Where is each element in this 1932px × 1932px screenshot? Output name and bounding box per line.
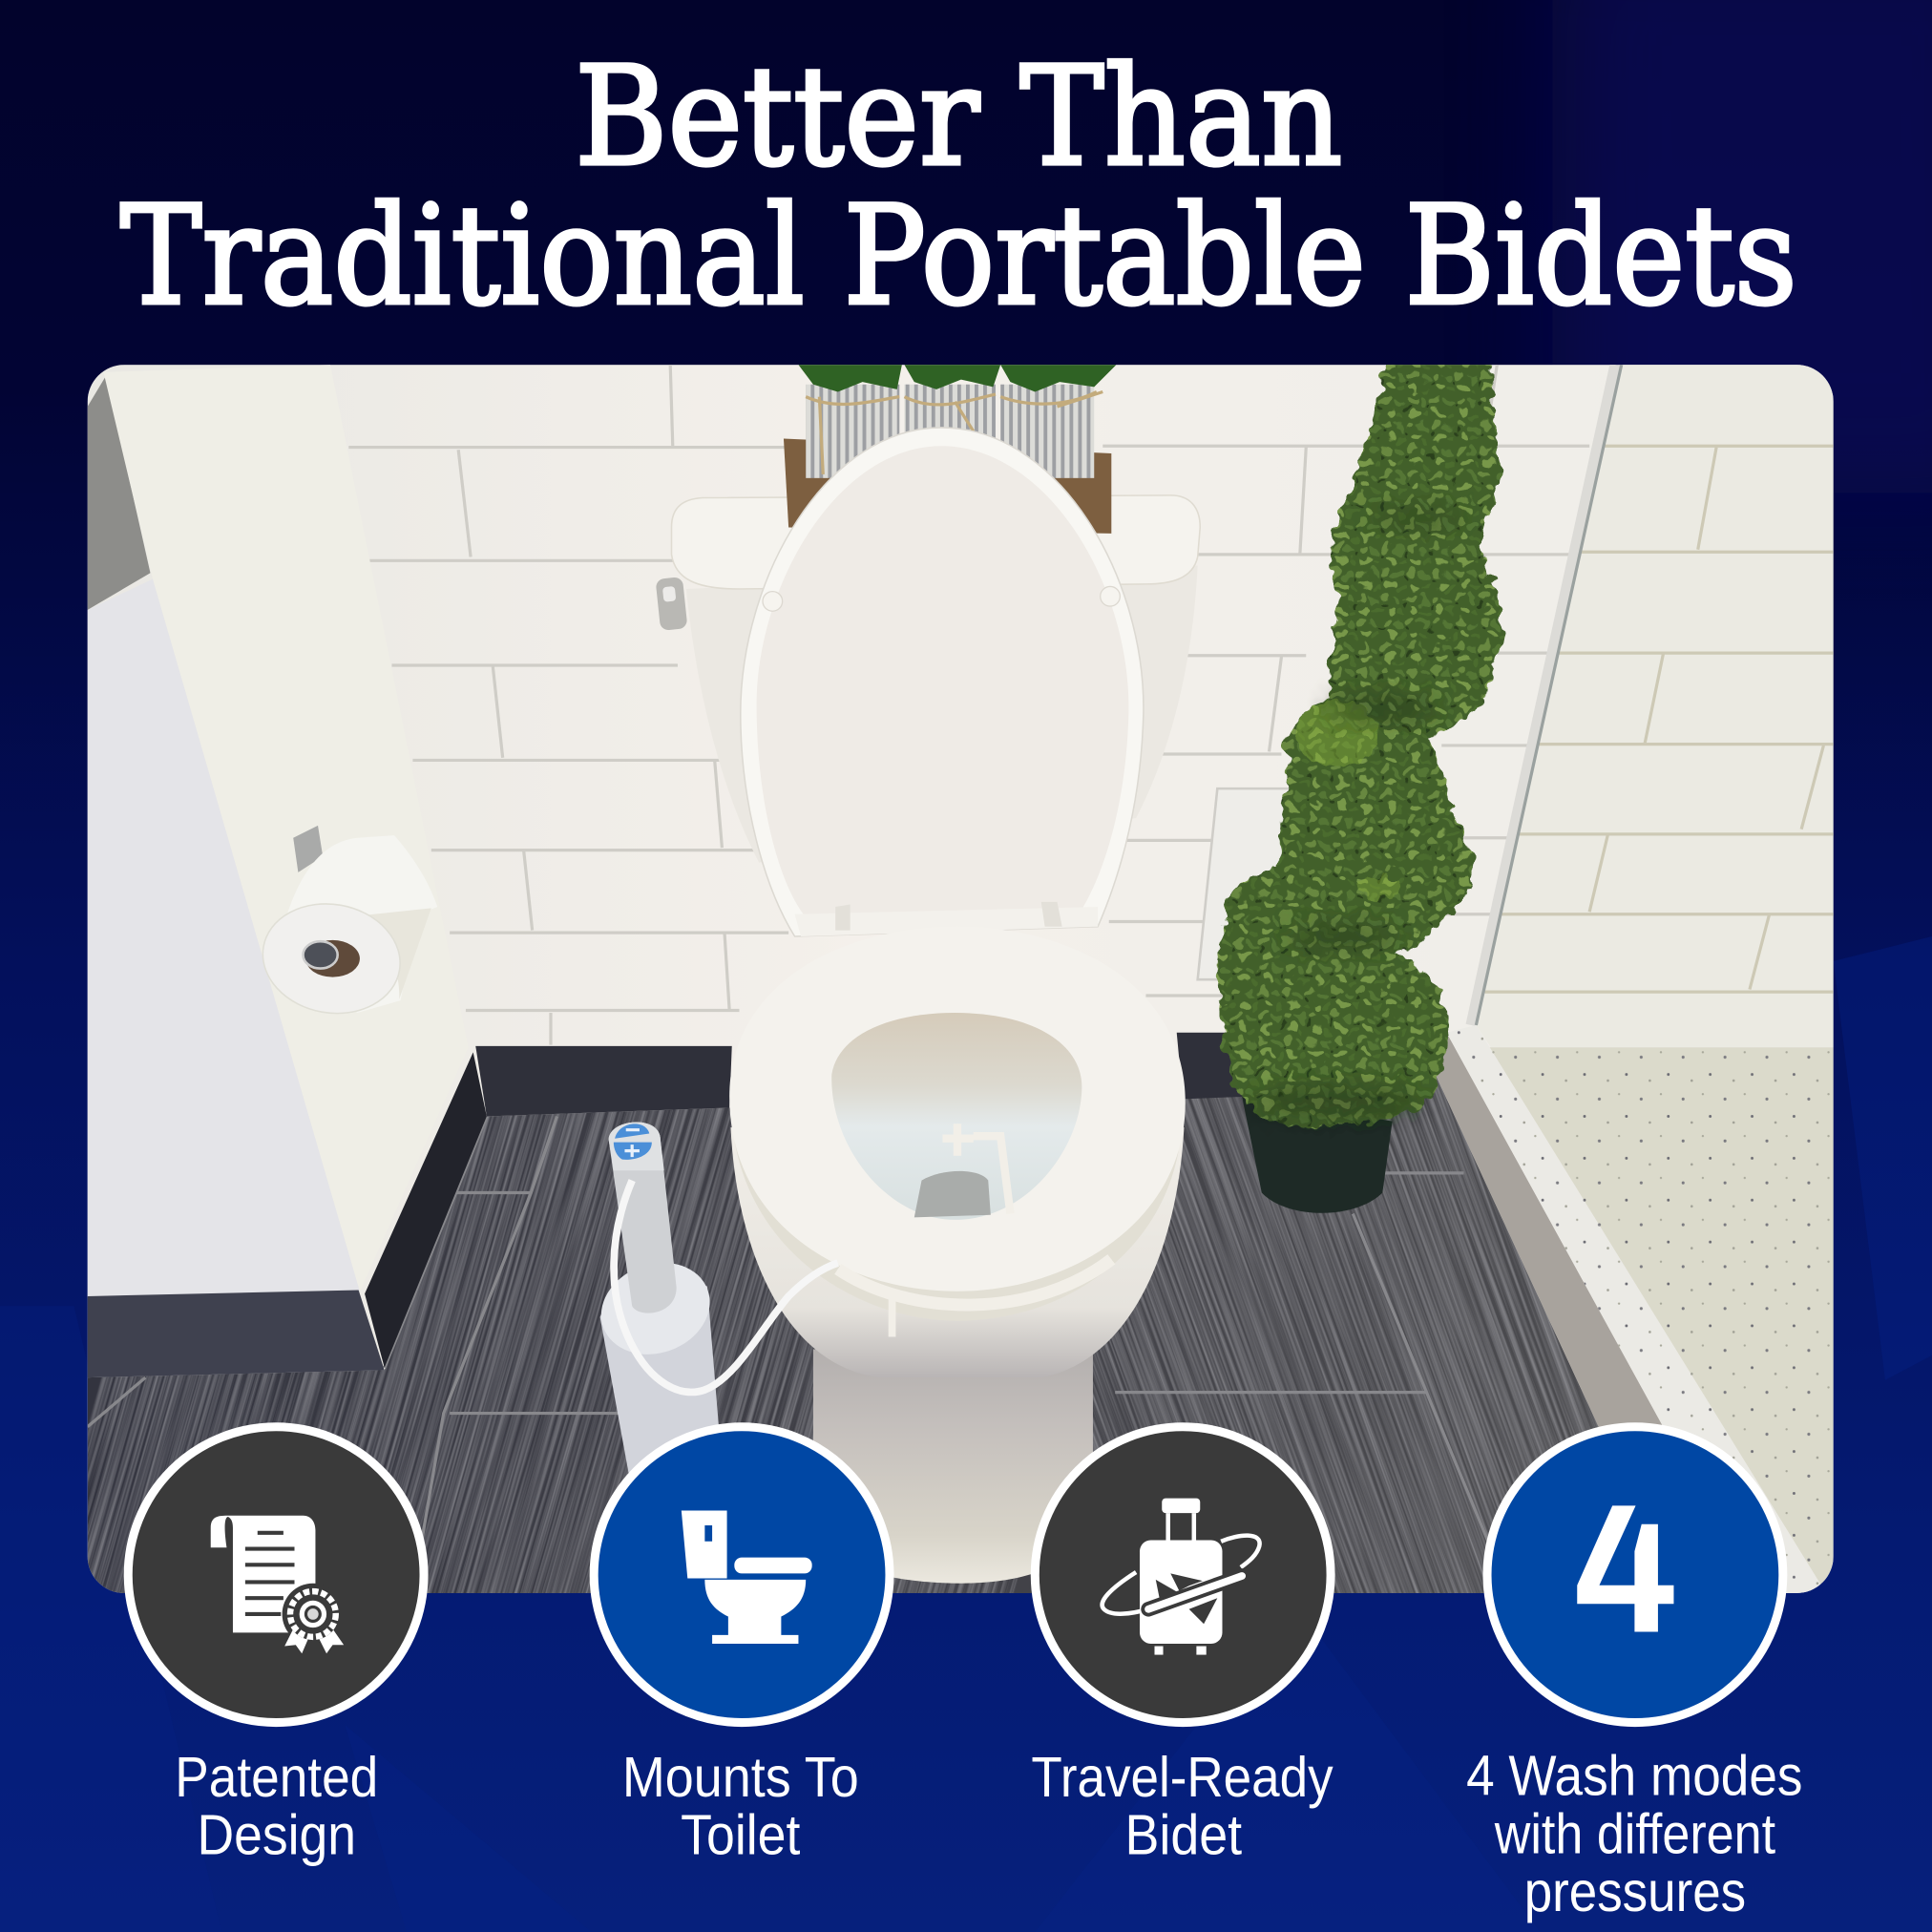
left side wall bbox=[88, 579, 360, 1297]
icon circle: patented design bbox=[128, 1427, 424, 1723]
shower curb bbox=[1435, 1025, 1826, 1593]
label: mounts to toilet bbox=[622, 1745, 859, 1867]
floor tile joints bbox=[88, 1116, 1487, 1543]
label: patented design bbox=[175, 1745, 378, 1867]
label: four wash modes: pressures bbox=[1524, 1859, 1746, 1923]
access panel on wall bbox=[1196, 787, 1289, 981]
shower wall bbox=[1621, 365, 1834, 1048]
toilet bowl bbox=[730, 1127, 1184, 1377]
planter box bbox=[784, 365, 1116, 534]
icon: certificate scroll with seal bbox=[211, 1516, 344, 1653]
icon circle: mounts to toilet bbox=[594, 1427, 890, 1723]
label: four wash modes: with different bbox=[1494, 1801, 1776, 1865]
shower floor bbox=[1488, 1047, 1834, 1593]
shower glass edge bbox=[1471, 365, 1615, 1025]
label: mounts to toilet: Mounts To bbox=[622, 1745, 859, 1809]
icon: toilet bbox=[682, 1511, 812, 1644]
seat clip bbox=[838, 1259, 1111, 1337]
pillar face bbox=[105, 365, 370, 562]
panel: bathroom photo bbox=[88, 365, 1834, 1593]
label: four wash modes: 4 Wash modes bbox=[1466, 1744, 1802, 1808]
label: patented design: Design bbox=[198, 1803, 356, 1867]
icon: suitcase with plane bbox=[1102, 1499, 1260, 1655]
toilet seat bbox=[729, 927, 1186, 1321]
plant topiary bbox=[1217, 357, 1503, 1213]
title: Better Than bbox=[575, 37, 1342, 197]
floor bbox=[88, 1077, 1599, 1593]
wall tile joints bbox=[348, 365, 1589, 1045]
title bbox=[120, 37, 1797, 336]
left dark recess bbox=[88, 376, 150, 610]
label: travel-ready bidet: Bidet bbox=[1125, 1803, 1243, 1867]
icon circle: travel-ready bbox=[1035, 1427, 1331, 1723]
baseboards bbox=[88, 1290, 385, 1377]
label: travel-ready bidet: Travel-Ready bbox=[1031, 1745, 1334, 1809]
label: four wash modes bbox=[1466, 1744, 1802, 1923]
toilet lid bbox=[741, 428, 1144, 936]
icon: numeral 4 bbox=[1577, 1505, 1673, 1632]
icon circle: four wash modes bbox=[1487, 1427, 1783, 1723]
portable bidet bbox=[588, 1123, 838, 1479]
label: travel-ready bidet bbox=[1031, 1745, 1334, 1867]
toilet pedestal bbox=[813, 1340, 1093, 1584]
bidet nozzle bbox=[942, 1124, 1010, 1213]
toilet paper roll bbox=[254, 826, 437, 1024]
label: patented design: Patented bbox=[175, 1745, 378, 1809]
label: mounts to toilet: Toilet bbox=[681, 1803, 801, 1867]
toilet tank bbox=[656, 495, 1200, 863]
